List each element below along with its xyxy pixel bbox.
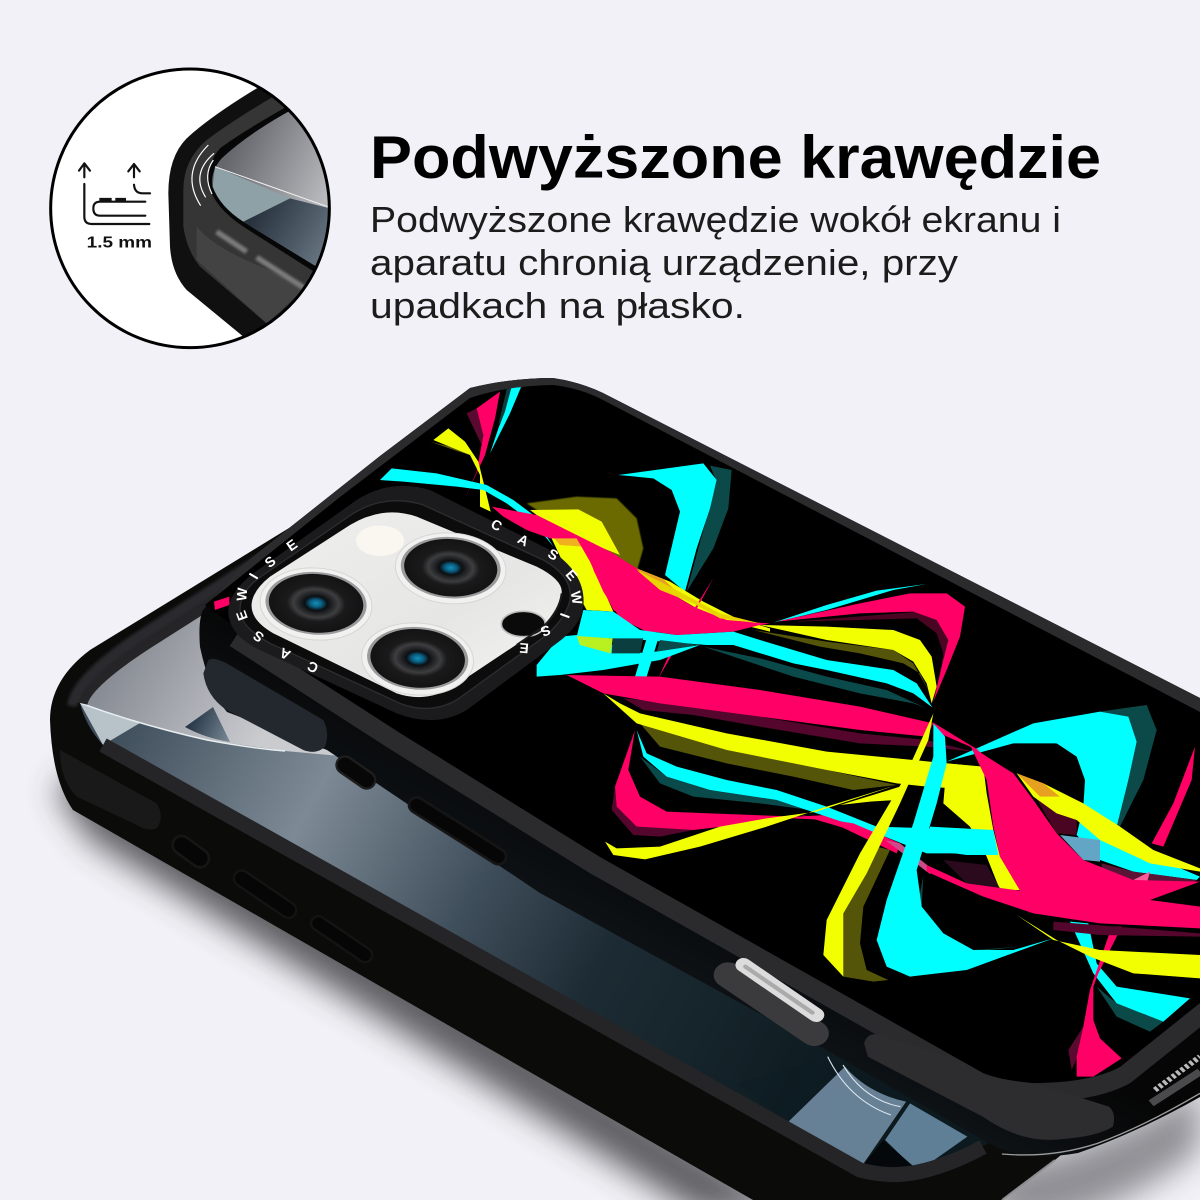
title: Podwyższone krawędzie <box>370 124 1101 191</box>
1.5 mm profile icon <box>79 163 150 224</box>
lens right <box>393 529 508 607</box>
front bumper patches and port <box>728 965 1200 1155</box>
front rim band <box>210 385 1200 1083</box>
lower edge highlight <box>1002 1093 1200 1155</box>
CASEWISE lettering: S <box>545 545 561 564</box>
inset background disc <box>51 69 329 348</box>
carbon bumper left <box>203 659 327 752</box>
CASEWISE lettering: E <box>233 609 251 623</box>
CASEWISE lettering: I <box>557 611 573 620</box>
CASEWISE lettering: S <box>261 553 279 571</box>
speaker grille <box>1155 1057 1200 1090</box>
CASEWISE lettering: E <box>283 536 300 554</box>
1.5 mm label: 1.5 mm <box>87 235 152 252</box>
back side buttons <box>182 845 365 955</box>
colour ribbons <box>380 386 1200 1077</box>
description text: Podwyższone krawędzie wokół ekranu i <box>370 199 1061 240</box>
back phone lower corner edge <box>1002 1160 1055 1200</box>
CASEWISE lettering: W <box>568 590 586 606</box>
inset case corner <box>168 88 328 336</box>
inset highlights <box>217 232 303 287</box>
CASEWISE lettering: I <box>245 570 261 582</box>
back phone case body <box>50 460 1200 1200</box>
ribbons lower-right <box>800 705 1200 1077</box>
inset circle: raised edge detail <box>51 60 340 348</box>
CASEWISE lettering: E <box>519 640 529 657</box>
description text: aparatu chronią urządzenie, przy <box>370 242 958 283</box>
ribbons centre <box>537 570 980 859</box>
camera module <box>214 486 586 720</box>
description text: upadkach na płasko. <box>370 285 745 326</box>
ribbons upper-left <box>380 386 770 633</box>
inset curved edge marks <box>192 145 214 206</box>
camera rim bevel <box>240 501 570 708</box>
mute switch and side button <box>345 765 498 857</box>
CASEWISE lettering: S <box>539 622 553 640</box>
rim over hole <box>517 593 562 645</box>
lens bottom <box>359 619 476 699</box>
CASEWISE lettering <box>233 516 586 677</box>
camera glass plate <box>252 512 562 697</box>
CASEWISE lettering: A <box>277 645 293 663</box>
charging port <box>728 965 816 1033</box>
CASEWISE lettering: A <box>515 531 532 549</box>
back carbon bumper <box>60 750 161 829</box>
CASEWISE lettering: W <box>233 586 250 602</box>
drop shadows <box>55 760 1200 1200</box>
description text <box>370 199 1061 326</box>
front phone case <box>199 378 1200 1156</box>
pink ribbon sliver <box>214 597 229 610</box>
flash <box>356 525 404 556</box>
carbon bumper right <box>864 1034 1114 1140</box>
inset circle outline <box>51 69 329 348</box>
CASEWISE lettering: C <box>488 516 505 534</box>
CASEWISE lettering: C <box>305 658 321 677</box>
artwork panel <box>205 385 1200 1083</box>
microphone hole <box>501 611 545 637</box>
back phone screen <box>80 616 988 1166</box>
back phone rim <box>80 525 983 1175</box>
inset screen <box>212 112 330 270</box>
CASEWISE lettering: S <box>250 627 267 646</box>
CASEWISE lettering: E <box>563 566 581 584</box>
back phone <box>50 527 1061 1200</box>
front phone <box>199 378 1200 1156</box>
lens left <box>258 564 374 644</box>
camera rim <box>228 486 584 720</box>
